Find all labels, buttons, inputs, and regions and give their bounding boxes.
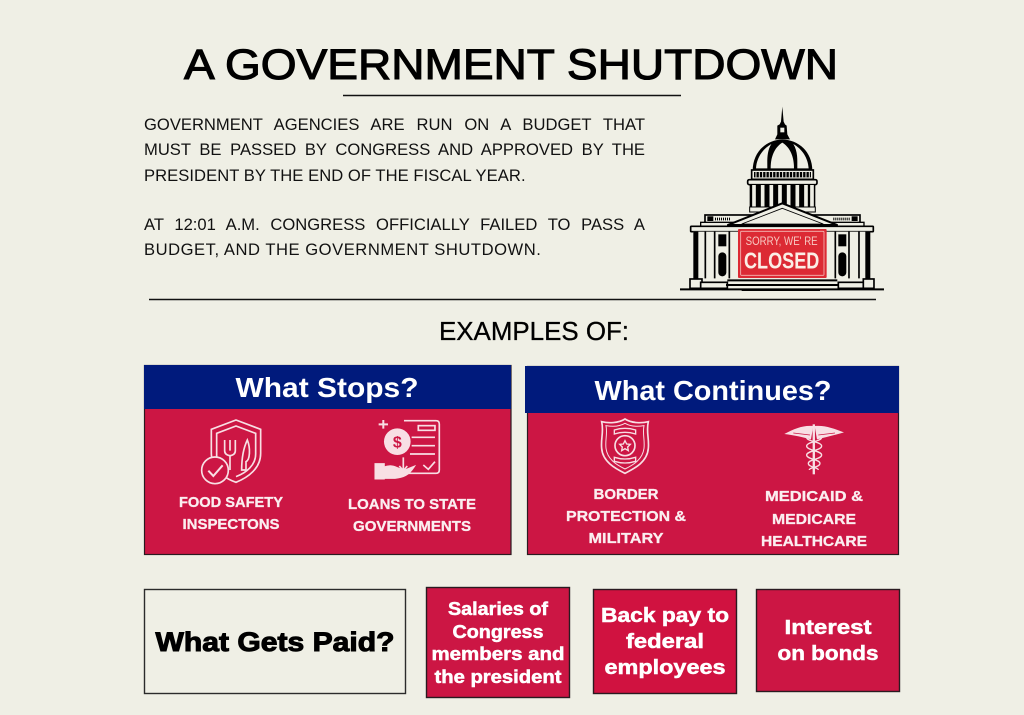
header: what continues [525, 366, 899, 413]
panel: what gets paid [144, 590, 406, 694]
title: A GOVERNMENT SHUTDOWN [184, 41, 838, 89]
closed sign [738, 229, 827, 278]
card: interest: Interest [784, 617, 872, 639]
header: what continues: What Continues? [594, 375, 832, 406]
text block: budget intro [144, 115, 645, 185]
card: salaries [426, 588, 570, 698]
label: food safety inspections: FOOD SAFETY [179, 494, 283, 511]
card: back pay: federal [626, 631, 704, 653]
icon: loan document with dollar and hand [375, 420, 439, 479]
header: what stops: What Stops? [236, 372, 418, 403]
icon: loan document with dollar and hand: $ [393, 434, 402, 451]
text block: budget intro: MUST BE PASSED BY CONGRESS AND APPROVED BY THE [144, 140, 645, 159]
header: what stops [144, 365, 511, 409]
icon: capitol building closed [680, 107, 884, 290]
label: loans to state governments: GOVERNMENTS [353, 518, 471, 535]
card: interest: on bonds [778, 643, 878, 665]
card: back pay: employees [604, 657, 726, 679]
closed sign: CLOSED [744, 248, 819, 274]
label: border protection and military: PROTECTION & [566, 508, 686, 525]
closed sign: SORRY, WE' RE [746, 235, 818, 248]
label: loans to state governments: LOANS TO STATE [348, 496, 476, 513]
icon: police badge [601, 419, 649, 473]
card: salaries: Salaries of [448, 599, 549, 619]
label: food safety inspections: INSPECTONS [182, 516, 280, 533]
label: medicaid and medicare healthcare: MEDICARE [772, 511, 856, 528]
card: back pay: Back pay to [601, 605, 729, 627]
text block: shutdown statement: BUDGET, AND THE GOVERNMENT SHUTDOWN. [144, 240, 541, 259]
card: salaries: members and [432, 644, 564, 664]
card: interest [756, 590, 900, 692]
icon: food safety shield [202, 420, 261, 484]
panel: what continues [525, 366, 899, 554]
card: back pay [594, 590, 736, 694]
text block: budget intro: GOVERNMENT AGENCIES ARE RUN ON A BUDGET THAT [144, 115, 645, 134]
heading: examples of: EXAMPLES OF: [439, 318, 629, 346]
card: salaries: the president [434, 667, 562, 687]
panel: what gets paid: What Gets Paid? [156, 627, 394, 657]
panel: what stops [144, 365, 511, 554]
label: medicaid and medicare healthcare: HEALTHCARE [761, 533, 867, 550]
text block: shutdown statement [144, 215, 645, 259]
label: medicaid and medicare healthcare: MEDICAID & [765, 488, 863, 505]
label: border protection and military: MILITARY [588, 530, 664, 547]
label: border protection and military: BORDER [594, 486, 659, 503]
text block: shutdown statement: AT 12:01 A.M. CONGRESS OFFICIALLY FAILED TO PASS A [144, 215, 645, 234]
card: salaries: Congress [452, 622, 544, 642]
text block: budget intro: PRESIDENT BY THE END OF THE FISCAL YEAR. [144, 166, 526, 185]
icon: caduceus [784, 424, 844, 474]
